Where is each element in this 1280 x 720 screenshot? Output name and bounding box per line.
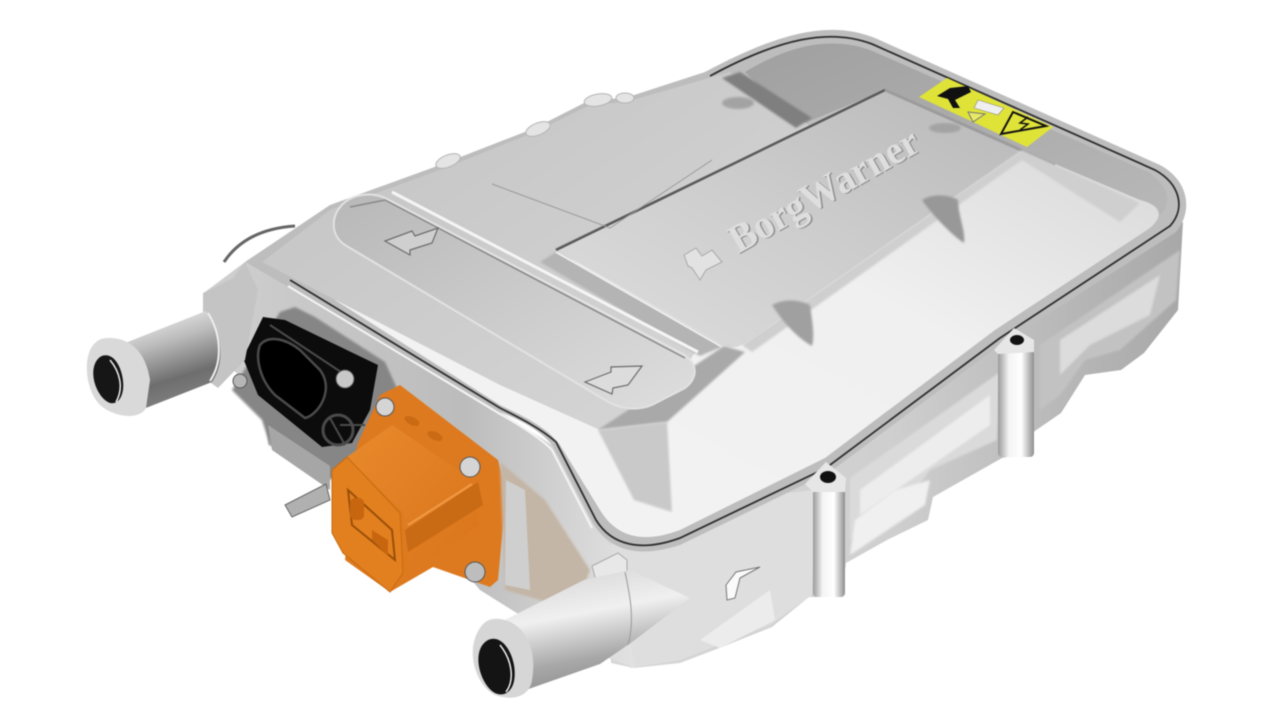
upper left lid panel xyxy=(262,72,810,430)
raised centre panel xyxy=(556,90,1055,348)
left pipe end ring xyxy=(87,338,150,416)
brand logo mark xyxy=(684,248,722,280)
pipe tab xyxy=(592,553,627,588)
mounting post one xyxy=(813,487,845,597)
ridge right of centre panel xyxy=(742,150,1140,352)
lid dark seam line xyxy=(290,37,1179,545)
lower coolant pipe xyxy=(473,553,690,698)
dark band between panels xyxy=(722,72,812,128)
thin cable behind the unit xyxy=(224,226,295,262)
connector screw right xyxy=(460,457,480,477)
black signal connector xyxy=(243,317,378,447)
label icon: high voltage triangle xyxy=(1001,112,1046,134)
connector slots xyxy=(403,414,421,428)
orange high voltage connector xyxy=(332,385,506,592)
connector face xyxy=(332,457,403,592)
connector screw top xyxy=(376,398,394,416)
screw left xyxy=(233,374,247,388)
left coolant pipe xyxy=(87,262,258,416)
slope band beside recessed panel xyxy=(540,252,724,356)
connector screw xyxy=(336,370,354,388)
small metal pin xyxy=(285,484,330,517)
connector screw bottom xyxy=(465,562,485,582)
small embossed arrow on side xyxy=(726,567,760,600)
main casting body lower side xyxy=(600,222,1183,668)
recess behind signal connector xyxy=(232,307,400,480)
bumps along top edge xyxy=(434,92,634,171)
fin marks on lid xyxy=(722,97,964,346)
recessed panel with arrows xyxy=(334,192,698,409)
mounting hole one xyxy=(805,462,846,492)
arrow emboss upper xyxy=(385,228,438,255)
slanted bevel at lid corner xyxy=(598,346,745,430)
label icon: manual xyxy=(974,100,1004,115)
arrow emboss lower xyxy=(585,366,642,394)
lower casting lip xyxy=(268,425,330,490)
brand name embossed: BorgWarner xyxy=(722,119,929,262)
connector backing plate xyxy=(500,462,590,610)
yellow warning label xyxy=(919,78,1053,147)
panel seam line xyxy=(492,160,712,228)
connector body xyxy=(347,425,480,575)
corner facet xyxy=(598,422,672,512)
mounting post two xyxy=(998,350,1034,457)
connector flange xyxy=(345,385,506,592)
brand name embossed: BorgWarner xyxy=(720,118,927,262)
lid outer rim xyxy=(245,30,1186,551)
lid rear panel xyxy=(745,43,1167,215)
label icon: small triangle xyxy=(968,112,985,122)
front wall of casting xyxy=(205,262,635,668)
lower pipe end ring xyxy=(473,619,533,698)
mounting hole two xyxy=(994,328,1034,354)
label icon: warning symbol xyxy=(937,86,971,108)
lid bright lower surface xyxy=(335,92,1159,537)
